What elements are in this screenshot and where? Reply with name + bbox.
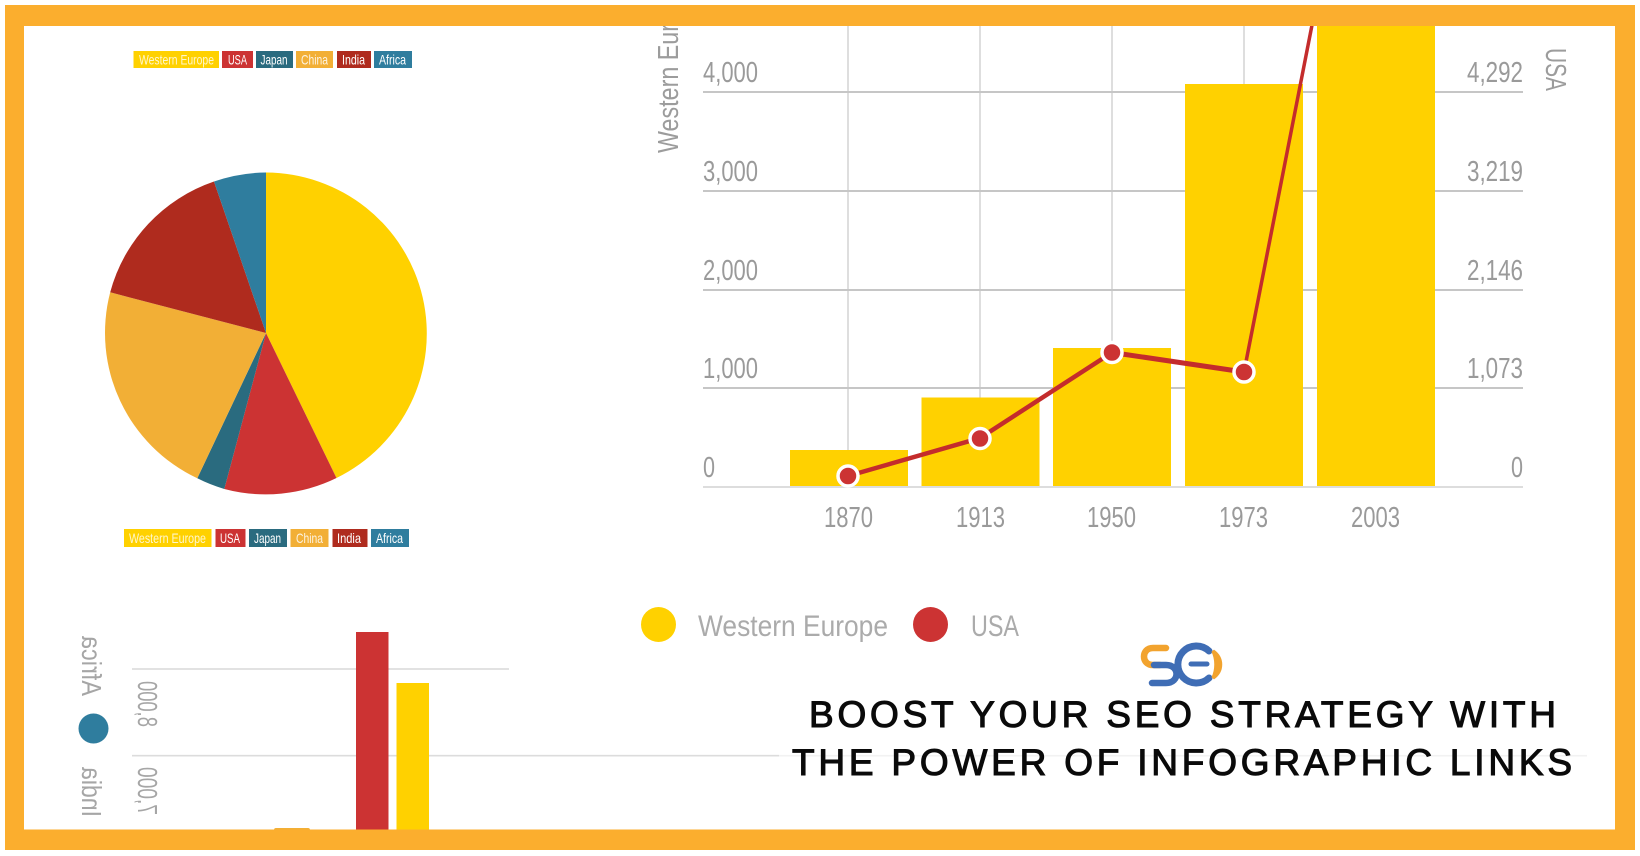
legend: below pie: Africa bbox=[376, 530, 403, 546]
legend: below pie: China bbox=[296, 530, 323, 546]
USA line bbox=[838, 20, 1313, 486]
mirrored axis labels bbox=[132, 681, 163, 815]
x axis year labels bbox=[824, 502, 1400, 534]
legend: top of pie bbox=[134, 51, 412, 68]
right axis labels: 1,073 bbox=[1467, 353, 1523, 385]
x axis year labels: 2003 bbox=[1351, 502, 1400, 534]
legend: below pie: India bbox=[337, 530, 361, 546]
mirrored lower bar chart bbox=[76, 632, 1587, 834]
legend: below pie bbox=[124, 529, 409, 547]
x axis year labels: 1950 bbox=[1087, 502, 1136, 534]
right axis labels: 2,146 bbox=[1467, 255, 1523, 287]
bubble legend: Western Europe and USA: USA bbox=[971, 610, 1019, 643]
bars bbox=[274, 632, 429, 834]
legend: top of pie: Japan bbox=[260, 52, 288, 68]
title: THE POWER OF INFOGRAPHIC LINKS bbox=[792, 742, 1572, 783]
mirrored legend: Africa, India bbox=[76, 636, 108, 817]
mirrored legend: Africa, India: India bbox=[76, 767, 107, 817]
mirrored legend: Africa, India: Africa bbox=[76, 636, 107, 696]
title: BOOST YOUR SEO STRATEGY WITH bbox=[809, 694, 1556, 735]
right axis title: USA bbox=[1539, 48, 1571, 91]
title bbox=[792, 694, 1572, 783]
legend: below pie: USA bbox=[220, 530, 240, 546]
legend: below pie: Japan bbox=[254, 530, 281, 546]
icon: SEO logo bbox=[1144, 646, 1220, 683]
legend: top of pie: Western Europe bbox=[139, 52, 214, 68]
bubble legend: Western Europe and USA bbox=[641, 607, 1019, 643]
bars bbox=[790, 20, 1435, 486]
pie chart bbox=[105, 172, 427, 494]
x axis year labels: 1913 bbox=[956, 502, 1005, 534]
left axis labels: 3,000 bbox=[703, 156, 758, 188]
left axis labels bbox=[703, 57, 758, 484]
legend: top of pie: India bbox=[342, 52, 365, 68]
right axis labels: 4,292 bbox=[1467, 57, 1523, 89]
right axis labels: 3,219 bbox=[1467, 156, 1523, 188]
x axis year labels: 1973 bbox=[1219, 502, 1268, 534]
main combo chart: Western Europe bars and USA line bbox=[653, 20, 1571, 534]
x axis year labels: 1870 bbox=[824, 502, 873, 534]
left axis labels: 0 bbox=[703, 452, 715, 484]
bubble legend: Western Europe and USA: Western Europe bbox=[698, 610, 888, 643]
right axis labels: 0 bbox=[1511, 452, 1523, 484]
legend: top of pie: USA bbox=[228, 52, 247, 68]
left axis labels: 4,000 bbox=[703, 57, 758, 89]
mirrored axis labels: 7,000 bbox=[132, 767, 163, 815]
left axis labels: 2,000 bbox=[703, 255, 758, 287]
legend: top of pie: Africa bbox=[379, 52, 406, 68]
mirrored axis labels: 8,000 bbox=[132, 681, 163, 727]
legend: below pie: Western Europe bbox=[129, 530, 206, 546]
right axis labels bbox=[1467, 57, 1523, 484]
left axis labels: 1,000 bbox=[703, 353, 758, 385]
legend: top of pie: China bbox=[301, 52, 328, 68]
